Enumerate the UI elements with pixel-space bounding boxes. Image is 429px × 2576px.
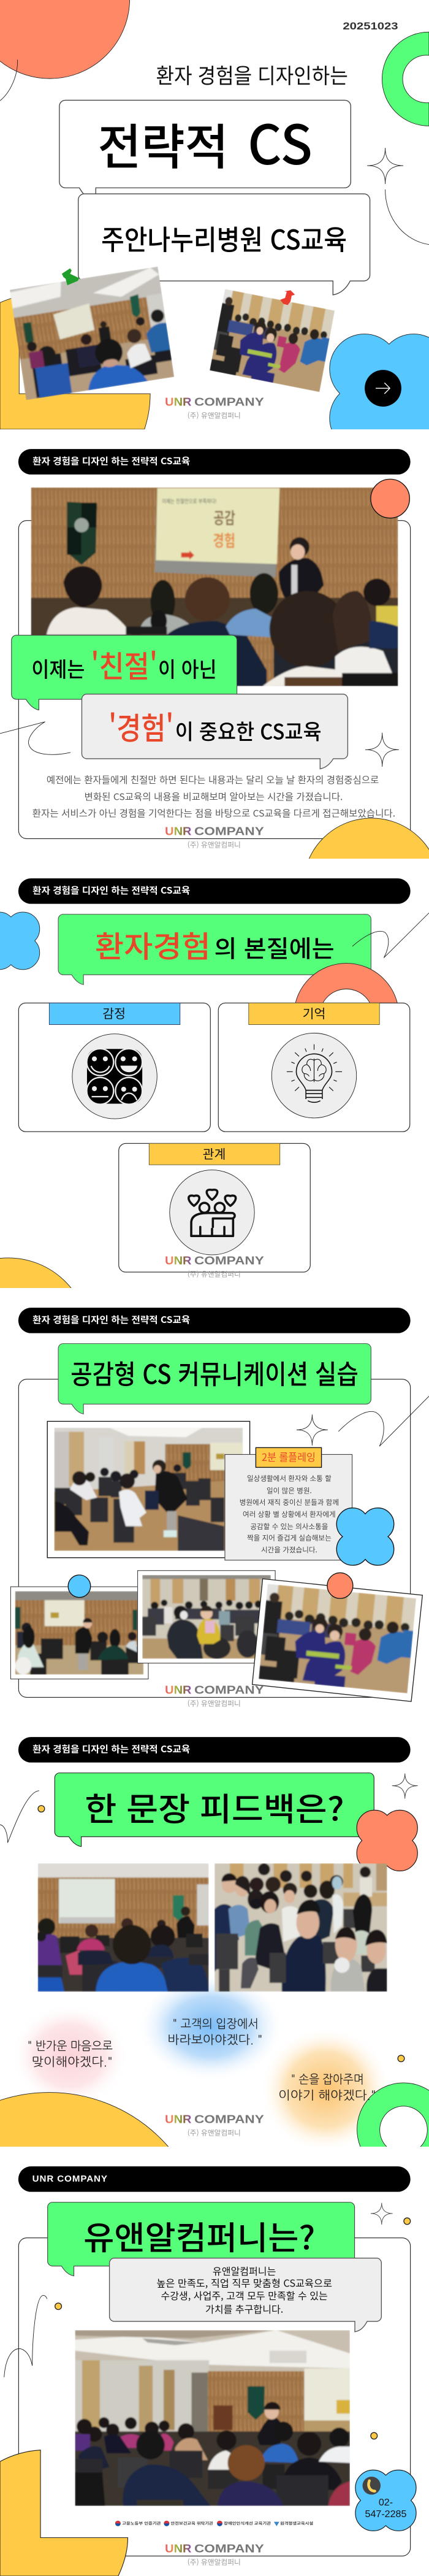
photo: speaker in front of screen bbox=[31, 487, 398, 686]
handwritten quote: orange bbox=[278, 2073, 376, 2101]
paragraph: 예전에는 환자들에게 친절만 하면 된다는 내용과는 달리 오늘 날 환자의 경험중심으로 bbox=[47, 773, 379, 786]
green speech bubble: 이 아닌 bbox=[158, 653, 217, 684]
gray speech bubble: 수강생, 사업주, 고객 모두 만족할 수 있는 bbox=[161, 2288, 328, 2302]
green speech bubble title bbox=[58, 914, 371, 984]
icon: brain light bulb bbox=[287, 1045, 342, 1102]
company logo bbox=[165, 2113, 264, 2138]
photo: speaker in front of screen: 공감 bbox=[213, 506, 235, 529]
certification strip: 안전보건교육 위탁기관 bbox=[171, 2521, 213, 2526]
yellow dot bbox=[371, 2432, 378, 2439]
yellow dot bbox=[55, 2303, 61, 2310]
blue flower bbox=[336, 1508, 394, 1565]
section 2: experience over kindness bbox=[0, 449, 429, 859]
blue flower bbox=[0, 912, 40, 970]
section 4: empathy communication practice bbox=[10, 1308, 429, 1709]
header pill: 환자 경험을 디자인 하는 전략적 CS교육 bbox=[32, 1742, 190, 1755]
speech bubble: main title: 전략적 bbox=[97, 108, 229, 178]
role play info box: 시간을 가졌습니다. bbox=[261, 1545, 317, 1555]
header pill bbox=[18, 449, 411, 475]
company logo: (주) 유앤알컴퍼니 bbox=[188, 2128, 241, 2138]
framed photo: role play bbox=[47, 1421, 250, 1558]
green speech bubble title bbox=[58, 1344, 371, 1414]
header pill bbox=[18, 2166, 411, 2192]
photo: lecture hall bbox=[75, 2330, 350, 2506]
card: relationship: 관계 bbox=[203, 1144, 226, 1162]
company logo: COMPANY bbox=[194, 2113, 264, 2126]
role play info box: 2분 롤플레잉 bbox=[262, 1449, 316, 1464]
icon: two people with hearts bbox=[189, 1190, 236, 1236]
company logo: UNR bbox=[165, 825, 192, 838]
orange circle bbox=[327, 1573, 353, 1598]
company logo: UNR bbox=[165, 2542, 192, 2555]
speech bubble: hospital name bbox=[78, 194, 370, 295]
company logo: COMPANY bbox=[194, 396, 264, 408]
orange glow bbox=[260, 2026, 391, 2153]
blue glow bbox=[137, 1972, 284, 2082]
framed photo: pairs talking bbox=[138, 1571, 275, 1663]
orange circle bbox=[371, 479, 409, 518]
green speech bubble title bbox=[55, 1773, 374, 1847]
check squiggle bbox=[0, 1791, 39, 1842]
handwritten quote: pink bbox=[28, 2039, 113, 2068]
pink glow bbox=[11, 2004, 129, 2107]
yellow circle bbox=[0, 1258, 89, 1419]
company logo: UNR bbox=[165, 1684, 192, 1696]
framed photo: speaker among audience bbox=[10, 1587, 148, 1679]
green speech bubble title: 의 본질에는 bbox=[214, 930, 335, 965]
company logo bbox=[165, 1684, 264, 1709]
card: emotion: 감정 bbox=[102, 1003, 126, 1022]
company logo: UNR bbox=[165, 396, 192, 408]
green ring bbox=[382, 32, 429, 126]
yellow dot bbox=[404, 2218, 411, 2225]
arrow button bbox=[365, 370, 401, 407]
company logo: (주) 유앤알컴퍼니 bbox=[188, 1699, 241, 1709]
photo: speaker in front of screen: 이제는 친절만으로 부족하다! bbox=[162, 497, 217, 505]
subtitle: 환자 경험을 디자인하는 bbox=[156, 59, 348, 90]
photo: speaker in front of screen: 경험 bbox=[213, 529, 235, 551]
photo: lecture seen from back bbox=[38, 1863, 209, 1992]
company logo bbox=[165, 2542, 264, 2567]
role play info box: 병원에서 재직 중이신 분들과 함께 bbox=[240, 1498, 339, 1508]
company logo: COMPANY bbox=[194, 825, 264, 838]
squiggle bbox=[338, 1396, 429, 1446]
card: relationship bbox=[119, 1143, 310, 1272]
yellow semicircle bbox=[0, 2093, 207, 2409]
squiggle bbox=[0, 722, 70, 754]
icon: green pushpin bbox=[62, 269, 79, 287]
company logo: COMPANY bbox=[194, 1684, 264, 1696]
company logo: UNR bbox=[165, 2113, 192, 2126]
yellow dot bbox=[398, 2055, 404, 2062]
green speech bubble title bbox=[48, 2202, 355, 2276]
photo: lecture room tilted bbox=[10, 266, 174, 401]
green speech bubble title: 유앤알컴퍼니는? bbox=[83, 2212, 315, 2259]
company logo bbox=[165, 825, 264, 850]
header pill: 환자 경험을 디자인 하는 전략적 CS교육 bbox=[32, 454, 190, 467]
handwritten quote: orange: 이야기 해야겠다." bbox=[278, 2089, 376, 2101]
green speech bubble title: 한 문장 피드백은? bbox=[85, 1784, 344, 1830]
paragraph: 환자는 서비스가 아닌 경험을 기억한다는 점을 바탕으로 CS교육을 다르게 접근해보았습니다. bbox=[32, 806, 395, 819]
sparkle bbox=[297, 1414, 328, 1446]
paragraph: 변화된 CS교육의 내용을 비교해보며 알아보는 시간을 가졌습니다. bbox=[85, 789, 343, 803]
role play info box bbox=[225, 1447, 352, 1560]
green speech bubble title: 환자경험 bbox=[95, 923, 211, 966]
photo: attendees with phones bbox=[214, 1863, 387, 1992]
gray speech bubble bbox=[82, 694, 347, 769]
handwritten quote: orange: " 손을 잡아주며 bbox=[291, 2073, 364, 2085]
company logo: UNR bbox=[165, 1254, 192, 1267]
squiggle bbox=[4, 2295, 47, 2377]
gray speech bubble: 가치를 추구합니다. bbox=[205, 2301, 283, 2316]
yellow corner shape bbox=[0, 2450, 127, 2576]
blue flower contact badge bbox=[355, 2470, 416, 2531]
card: emotion bbox=[18, 1003, 210, 1132]
company logo: (주) 유앤알컴퍼니 bbox=[188, 411, 241, 421]
icon: phone bbox=[363, 2477, 381, 2494]
role play info box: 여러 상황 별 상황에서 환자에게 bbox=[243, 1509, 336, 1519]
sparkle bbox=[371, 2203, 393, 2225]
panel outline bbox=[18, 1379, 411, 1697]
speech bubble: hospital name: 주안나누리병원 CS교육 bbox=[101, 218, 347, 258]
company logo: (주) 유앤알컴퍼니 bbox=[188, 840, 241, 850]
role play info box: 일상생활에서 환자와 소통 할 bbox=[247, 1474, 332, 1484]
green speech bubble bbox=[12, 635, 237, 710]
yellow circle bbox=[303, 818, 429, 955]
sparkle bbox=[392, 1774, 418, 1799]
handwritten quote: blue: 바라보아야겠다. " bbox=[167, 2034, 263, 2046]
handwritten quote: pink: 맞이해야겠다." bbox=[31, 2055, 113, 2068]
icon: four emotion faces bbox=[87, 1049, 142, 1104]
gray speech bubble: '경험' bbox=[108, 704, 173, 748]
role play info box: 짝을 지어 즐겁게 실습해보는 bbox=[247, 1533, 332, 1543]
yellow dot bbox=[38, 1806, 45, 1812]
company logo: COMPANY bbox=[194, 2542, 264, 2555]
card: memory bbox=[218, 1003, 410, 1132]
company logo: (주) 유앤알컴퍼니 bbox=[188, 2558, 241, 2567]
card: memory: 기억 bbox=[303, 1003, 325, 1022]
squiggle bbox=[352, 913, 429, 958]
icon: red pushpin bbox=[280, 290, 295, 305]
header pill bbox=[18, 878, 411, 904]
certification strip: 고용노동부 인증기관 bbox=[122, 2521, 161, 2526]
company logo: COMPANY bbox=[194, 1254, 264, 1267]
green speech bubble: 이제는 bbox=[31, 653, 85, 684]
gray speech bubble bbox=[110, 2258, 381, 2332]
green speech bubble: '친절' bbox=[91, 643, 158, 686]
tilted photo: audience in uniforms bbox=[252, 1579, 422, 1701]
orange arch bbox=[294, 964, 399, 1016]
company logo: (주) 유앤알컴퍼니 bbox=[188, 1270, 241, 1279]
header pill bbox=[18, 1737, 411, 1763]
panel outline bbox=[18, 2238, 411, 2556]
yellow corner shape bbox=[0, 296, 150, 429]
panel outline bbox=[18, 521, 411, 838]
company logo bbox=[165, 1254, 264, 1279]
header pill: 환자 경험을 디자인 하는 전략적 CS교육 bbox=[32, 884, 190, 897]
blue circle bbox=[68, 1575, 91, 1597]
date: 20251023 bbox=[343, 20, 398, 32]
gray speech bubble: 이 중요한 CS교육 bbox=[175, 715, 322, 746]
handwritten quote: blue bbox=[167, 2018, 263, 2046]
sparkle bbox=[365, 733, 399, 767]
gray speech bubble: 유앤알컴퍼니는 bbox=[213, 2263, 276, 2278]
sparkle bbox=[367, 148, 403, 184]
thin arc decoration bbox=[0, 59, 18, 101]
certification strip: 장애인인식개선 교육기관 bbox=[224, 2521, 271, 2526]
section 6: about UNR company bbox=[0, 2166, 417, 2576]
role play info box: 공감할 수 있는 의사소통을 bbox=[250, 1522, 328, 1531]
blue flower contact badge: 547-2285 bbox=[365, 2509, 406, 2520]
certification strip: 원격평생교육시설 bbox=[280, 2521, 313, 2526]
company logo bbox=[165, 396, 264, 421]
paragraph bbox=[32, 773, 395, 819]
blue flower bbox=[330, 334, 429, 453]
section 5: one sentence feedback bbox=[0, 1737, 429, 2147]
orange circle decoration bbox=[0, 0, 130, 79]
green ring bbox=[357, 2083, 429, 2176]
certification strip bbox=[115, 2521, 313, 2526]
header pill: 환자 경험을 디자인 하는 전략적 CS교육 bbox=[32, 1313, 190, 1326]
photo: crowd in uniforms tilted bbox=[210, 289, 335, 392]
orange flower bbox=[357, 1810, 417, 1871]
role play info box: 일이 많은 병원. bbox=[267, 1485, 312, 1495]
green speech bubble title: 공감형 CS 커뮤니케이션 실습 bbox=[70, 1352, 359, 1392]
speech bubble: main title: CS bbox=[248, 102, 313, 180]
gray speech bubble: 높은 만족도, 직업 직무 맞춤형 CS교육으로 bbox=[156, 2275, 332, 2290]
speech bubble: main title bbox=[59, 100, 351, 201]
header pill: UNR COMPANY bbox=[32, 2174, 107, 2184]
handwritten quote: pink: " 반가운 마음으로 bbox=[28, 2039, 113, 2052]
handwritten quote: blue: " 고객의 입장에서 bbox=[172, 2018, 259, 2030]
header pill bbox=[18, 1308, 411, 1333]
blue flower contact badge: 02- bbox=[379, 2497, 393, 2508]
thin arc right bbox=[385, 190, 429, 245]
section 3: essence of patient experience bbox=[0, 878, 429, 1288]
section 1: cover bbox=[0, 0, 429, 429]
